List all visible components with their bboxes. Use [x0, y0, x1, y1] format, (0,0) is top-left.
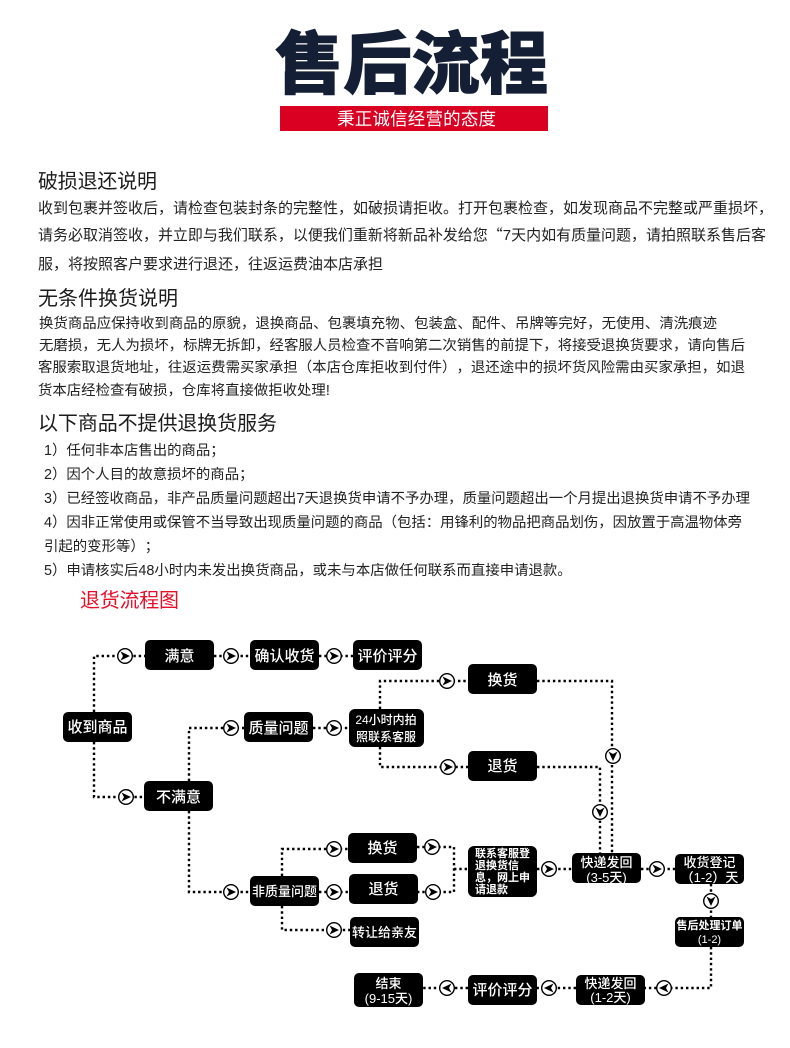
box: end: 结束	[375, 976, 402, 991]
box: after-sales order	[675, 917, 744, 947]
box: exchange upper: 换货	[487, 672, 518, 689]
text block: exchange: 换货商品应保持收到商品的原貌，退换商品、包裹填充物、包装盒、配件、吊牌等完好，无使用、清洗痕迹	[39, 314, 717, 332]
box: receipt registration	[675, 854, 744, 885]
box: receipt registration: 收货登记	[683, 855, 736, 870]
box: satisfied	[145, 640, 214, 670]
box: receipt registration: （1-2）天	[681, 870, 738, 885]
heading: non-returnable: 以下商品不提供退换货服务	[38, 412, 277, 435]
box: review final: 评价评分	[472, 982, 533, 999]
box: contact service: 息，网上申	[475, 870, 530, 884]
box: return lower: 退货	[368, 881, 399, 898]
text block: non-returnable list: 4）因非正常使用或保管不当导致出现质量问题的商品（包括：用锋利的物品把商品划伤，因放置于高温物体旁	[44, 514, 742, 531]
box: exchange lower	[348, 833, 417, 863]
box: received goods: 收到商品	[67, 719, 128, 736]
box: exchange upper	[468, 664, 537, 694]
box: not satisfied: 不满意	[156, 788, 201, 806]
subtitle banner: 秉正诚信经营的态度	[337, 109, 496, 129]
box: courier return 3-5 days: 快递发回	[580, 855, 633, 870]
heading: exchange: 无条件换货说明	[38, 287, 178, 310]
box: return lower	[349, 874, 418, 904]
box: photo contact within 24h: 照联系客服	[356, 729, 416, 744]
connectors	[94, 656, 711, 988]
box: courier return 3-5 days	[572, 853, 641, 885]
text block: non-returnable list: 3）已经签收商品，非产品质量问题超出7天退换货申请不予办理，质量问题超出一个月提出退换货申请不予办理	[44, 490, 750, 507]
box: non-quality issue: 非质量问题	[252, 884, 317, 899]
box: non-quality issue	[250, 876, 319, 906]
flowchart	[63, 640, 744, 1007]
box: courier return 1-2 days: 快递发回	[584, 976, 637, 991]
text block: damage return: 请务必取消签收，并立即与我们联系，以便我们重新将新品补发给您“7天内如有质量问题，请拍照联系售后客	[38, 224, 766, 245]
box: contact service	[468, 846, 537, 897]
text block: exchange: 货本店经检查有破损，仓库将直接做拒收处理!	[38, 382, 330, 399]
box: received goods	[63, 712, 132, 742]
text block: damage return: 收到包裹并签收后，请检查包装封条的完整性，如破损请拒收。打开包裹检查，如发现商品不完整或严重损坏，	[38, 200, 773, 217]
box: courier return 1-2 days	[576, 975, 645, 1005]
text block: damage return	[38, 200, 773, 273]
box: quality issue: 质量问题	[248, 720, 309, 737]
box: contact service: 联系客服登	[475, 846, 530, 860]
box: transfer to friends	[350, 917, 419, 947]
section: exchange notes	[38, 287, 745, 399]
box: return upper	[468, 751, 537, 781]
text block: non-returnable list: 2）因个人目的故意损坏的商品；	[44, 465, 253, 483]
text block: non-returnable list: 引起的变形等）；	[44, 537, 159, 555]
text block: exchange	[38, 314, 745, 399]
title: 售后流程	[275, 27, 548, 103]
box: courier return 3-5 days: (3-5天)	[586, 870, 627, 885]
text block: non-returnable list: 5）申请核实后48小时内未发出换货商品，或未与本店做任何联系而直接申请退款。	[44, 562, 572, 579]
box: photo contact within 24h: 24小时内拍	[355, 712, 417, 727]
box: transfer to friends: 转让给亲友	[352, 925, 417, 940]
box: satisfied: 满意	[164, 647, 195, 665]
section: non-returnable goods	[38, 412, 750, 579]
text block: exchange: 客服索取退货地址，往返运费需买家承担（本店仓库拒收到付件），退还途中的损坏货风险需由买家承担，如退	[38, 359, 745, 376]
box: review final	[468, 975, 537, 1005]
box: photo contact within 24h	[349, 709, 424, 747]
heading: damage return: 破损退还说明	[38, 170, 157, 193]
box: contact service: 请退款	[475, 882, 508, 896]
box: return upper: 退货	[487, 758, 518, 775]
box: courier return 1-2 days: (1-2天)	[590, 990, 631, 1005]
box: confirm receipt: 确认收货	[254, 648, 315, 665]
text block: non-returnable list	[44, 442, 750, 579]
section: damage return notes	[38, 170, 773, 273]
box: confirm receipt	[250, 640, 319, 670]
box: end: (9-15天)	[365, 991, 412, 1006]
box: review: 评价评分	[357, 648, 418, 665]
text block: damage return: 服，将按照客户要求进行退还，往返运费油本店承担	[38, 256, 383, 273]
arrow icons	[118, 649, 718, 995]
box: quality issue	[244, 712, 313, 742]
box: exchange lower: 换货	[367, 840, 398, 857]
box: after-sales order: (1-2)	[698, 934, 721, 946]
box: review	[353, 640, 422, 670]
box: after-sales order: 售后处理订单	[676, 918, 742, 932]
box: end	[354, 973, 423, 1007]
text block: non-returnable list: 1）任何非本店售出的商品；	[44, 442, 225, 459]
box: not satisfied	[144, 781, 213, 811]
text block: exchange: 无磨损，无人为损坏，标牌无拆卸，经客服人员检查不音响第二次销售的前提下，将接受退换货要求，请向售后	[39, 336, 745, 354]
subtitle banner	[280, 106, 548, 131]
heading: return flowchart: 退货流程图	[80, 589, 179, 612]
box: contact service: 退换货信	[475, 858, 519, 872]
